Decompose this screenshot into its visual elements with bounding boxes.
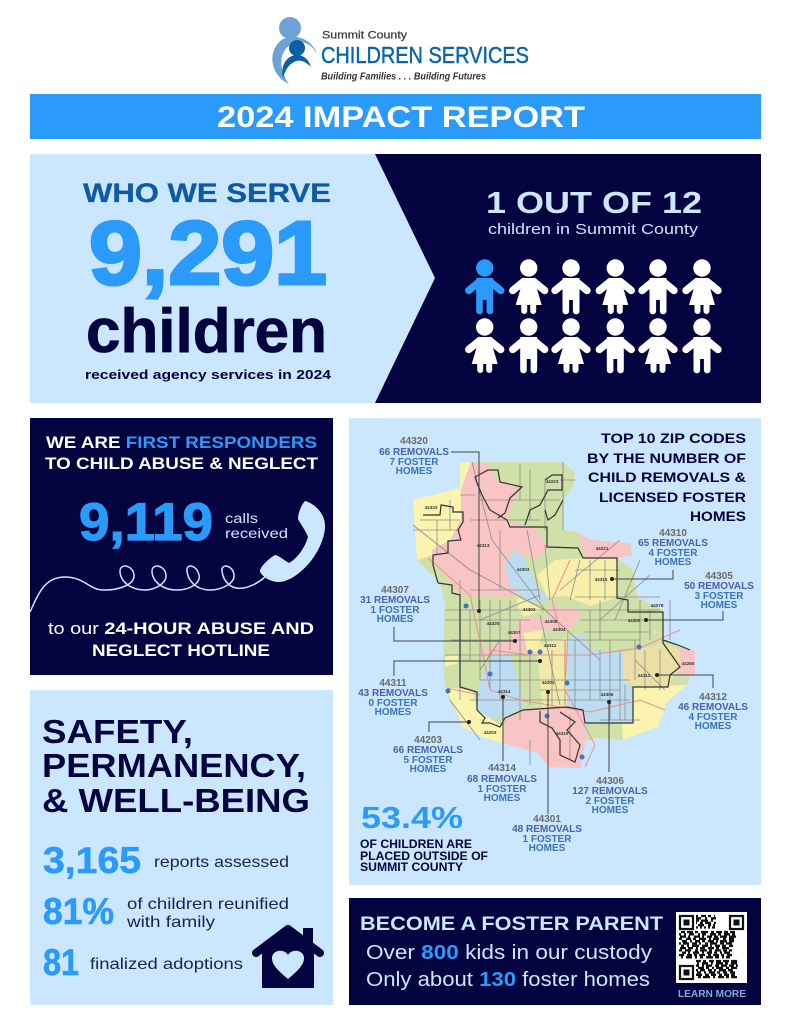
callout: 44311: 44311 — [379, 678, 407, 689]
heading line 1: WE ARE FIRST RESPONDERS — [46, 433, 317, 452]
panel: become a foster parent — [349, 898, 761, 1005]
stat: children placed outside county: PLACED OUTSIDE OF — [360, 851, 488, 863]
callout: 44307: 1 FOSTER — [371, 605, 420, 616]
map zip labels: 44303 — [517, 567, 530, 572]
callout: 44310: 65 REMOVALS — [638, 538, 708, 549]
callout: 44314: 1 FOSTER — [478, 784, 527, 795]
heading: top 10 zip codes: BY THE NUMBER OF — [587, 450, 747, 466]
map zip labels: 44304 — [553, 627, 566, 632]
heading — [42, 713, 310, 819]
stat: reports assessed: 3,165 — [43, 840, 141, 881]
heading: SAFETY, — [42, 713, 193, 750]
panel: who we serve — [30, 154, 450, 403]
callout: 44310: HOMES — [655, 557, 692, 568]
callout: 44306 — [572, 700, 648, 816]
stat: reunified: of children reunified — [127, 896, 289, 913]
stat: reports assessed: reports assessed — [154, 854, 289, 871]
heading: top 10 zip codes: LICENSED FOSTER — [599, 489, 746, 505]
map zip labels: 44310 — [595, 577, 608, 582]
map zip labels: 44311 — [544, 643, 557, 648]
zip code boundaries — [423, 470, 690, 762]
callout: 44314: 68 REMOVALS — [467, 774, 537, 785]
number of calls: 9,119 — [79, 493, 213, 552]
heading: top 10 zip codes: CHILD REMOVALS & — [588, 469, 746, 485]
callout: 44203: 66 REMOVALS — [393, 745, 463, 756]
callout: 44306: 2 FOSTER — [586, 796, 635, 807]
map zip labels: 44306 — [601, 692, 614, 697]
callout: 44301: 44301 — [533, 814, 561, 825]
logo text: tagline: Building Families . . . Building Futures — [321, 70, 486, 82]
map of Summit County — [413, 462, 695, 768]
stat: reunified: 81% — [43, 891, 114, 932]
stat: adoptions: finalized adoptions — [90, 956, 243, 973]
callout: 44310 — [610, 528, 708, 581]
icon: grid of twelve children — [469, 259, 718, 373]
callout: 44305 — [644, 571, 754, 622]
heading: top 10 zip codes: TOP 10 ZIP CODES — [601, 430, 746, 446]
callout: 44310: 44310 — [659, 528, 687, 539]
heading: & WELL-BEING — [42, 782, 310, 819]
heading: top 10 zip codes: HOMES — [690, 508, 746, 524]
text: kids in custody: Over 800 kids in our custody — [366, 942, 652, 964]
callout: 44320: 66 REMOVALS — [379, 447, 449, 458]
roads — [413, 462, 670, 765]
calls label: calls — [225, 510, 258, 526]
panel: 1 out of 12 — [375, 154, 761, 403]
map zip labels: 44305 — [628, 618, 641, 623]
panel: safety, permanency and well-being — [30, 690, 333, 1005]
callout: 44312 — [655, 673, 748, 732]
map zip labels: 44308 — [545, 619, 558, 624]
title banner — [30, 94, 761, 139]
callout: 44312: 46 REMOVALS — [678, 702, 748, 713]
stat: reunified — [43, 891, 289, 932]
learn more label: LEARN MORE — [678, 989, 746, 1000]
stat: adoptions: 81 — [43, 942, 79, 983]
panel: first responders — [30, 418, 333, 675]
map zip labels: 44307 — [508, 630, 521, 635]
heading: BECOME A FOSTER PARENT — [360, 914, 663, 935]
callout: 44311: 43 REMOVALS — [358, 688, 428, 699]
callout: 44307 — [360, 585, 517, 643]
callout: 44312: 4 FOSTER — [689, 712, 738, 723]
QR code — [676, 912, 747, 983]
icon: telephone handset with cord — [30, 501, 325, 612]
callout: 44311 — [358, 659, 542, 718]
callout: 44306: 127 REMOVALS — [572, 786, 648, 797]
callout: 44301: 1 FOSTER — [523, 834, 572, 845]
callout: 44310: 4 FOSTER — [649, 548, 698, 559]
map zip labels: 44314 — [498, 689, 511, 694]
callout: 44203: 5 FOSTER — [404, 755, 453, 766]
callout: 44305: 44305 — [705, 571, 733, 582]
stat: children placed outside county: 53.4% — [361, 800, 463, 835]
map zip labels: 44203 — [484, 730, 497, 735]
callout: 44307: HOMES — [377, 614, 414, 625]
statistic: 1 out of 12: 1 OUT OF 12 — [486, 185, 702, 220]
logo text: Summit County: Summit County — [322, 30, 408, 42]
children label: children — [86, 297, 327, 366]
heading: top 10 zip codes — [587, 430, 747, 524]
callout: 44320 — [379, 436, 481, 613]
map zip labels: 44313 — [477, 543, 490, 548]
callout: 44320: 7 FOSTER — [390, 457, 439, 468]
icon: house with heart — [256, 928, 320, 988]
callout: 44307: 44307 — [381, 585, 409, 596]
stat: reports assessed — [43, 840, 289, 881]
icon: parent and child figures — [272, 17, 317, 84]
map zip labels: 44312 — [638, 673, 651, 678]
map zip labels: 44319 — [556, 731, 569, 736]
map zip labels: 44320 — [487, 621, 500, 626]
caption: received agency services in 2024 — [85, 367, 332, 382]
stat: children placed outside county — [360, 800, 488, 874]
stat: children placed outside county: OF CHILDREN ARE — [360, 839, 472, 851]
text: foster homes: Only about 130 foster homes — [366, 969, 650, 991]
big number: 9,291 — [89, 204, 327, 304]
callout: 44312: 44312 — [699, 692, 727, 703]
callout: 44307: 31 REMOVALS — [360, 595, 430, 606]
callout: 44301: HOMES — [529, 843, 566, 854]
caption: children in Summit County — [488, 221, 699, 238]
callout: 44305: HOMES — [701, 600, 738, 611]
hotline line 2: NEGLECT HOTLINE — [92, 641, 270, 660]
callout: 44314 — [467, 695, 537, 804]
hotline line 1: to our 24-HOUR ABUSE AND — [48, 619, 314, 638]
stat: reunified: with family — [126, 914, 215, 931]
callout: 44320: HOMES — [396, 466, 433, 477]
callout: 44305: 3 FOSTER — [695, 591, 744, 602]
callout: 44314: HOMES — [484, 793, 521, 804]
heading: PERMANENCY, — [42, 747, 306, 784]
callout: 44311: HOMES — [375, 707, 412, 718]
map zip labels: 44221 — [596, 546, 609, 551]
interstate shields — [446, 604, 642, 760]
map zip labels: 44301 — [542, 680, 555, 685]
received label: received — [225, 525, 288, 541]
heading line 2: TO CHILD ABUSE & NEGLECT — [45, 454, 319, 473]
callout: 44203: HOMES — [410, 764, 447, 775]
panel: zip code map — [349, 418, 761, 885]
callout: 44314: 44314 — [488, 763, 516, 774]
callout: 44203: 44203 — [414, 735, 442, 746]
title: 2024 IMPACT REPORT — [217, 101, 585, 134]
callout: 44311: 0 FOSTER — [369, 698, 418, 709]
callout: 44305: 50 REMOVALS — [684, 581, 754, 592]
callout: 44306: 44306 — [596, 776, 624, 787]
map zip labels: 44260 — [682, 661, 695, 666]
map zip labels: 44278 — [651, 603, 664, 608]
heading: who we serve: WHO WE SERVE — [83, 178, 331, 208]
map zip labels: 44223 — [546, 479, 559, 484]
callout: 44312: HOMES — [695, 721, 732, 732]
map zip labels — [425, 479, 695, 736]
callout: 44301 — [512, 690, 582, 854]
map zip labels: 44302 — [523, 607, 536, 612]
stat: adoptions — [43, 942, 243, 983]
callout: 44203 — [393, 720, 471, 775]
logo: Summit County Children Services — [272, 17, 529, 84]
callout: 44320: 44320 — [400, 436, 428, 447]
map zip labels: 44333 — [425, 505, 438, 510]
stat: children placed outside county: SUMMIT COUNTY — [360, 862, 463, 874]
highways — [428, 558, 680, 767]
callout: 44301: 48 REMOVALS — [512, 824, 582, 835]
logo text: Children Services: CHILDREN SERVICES — [321, 42, 529, 68]
callout: 44306: HOMES — [592, 805, 629, 816]
